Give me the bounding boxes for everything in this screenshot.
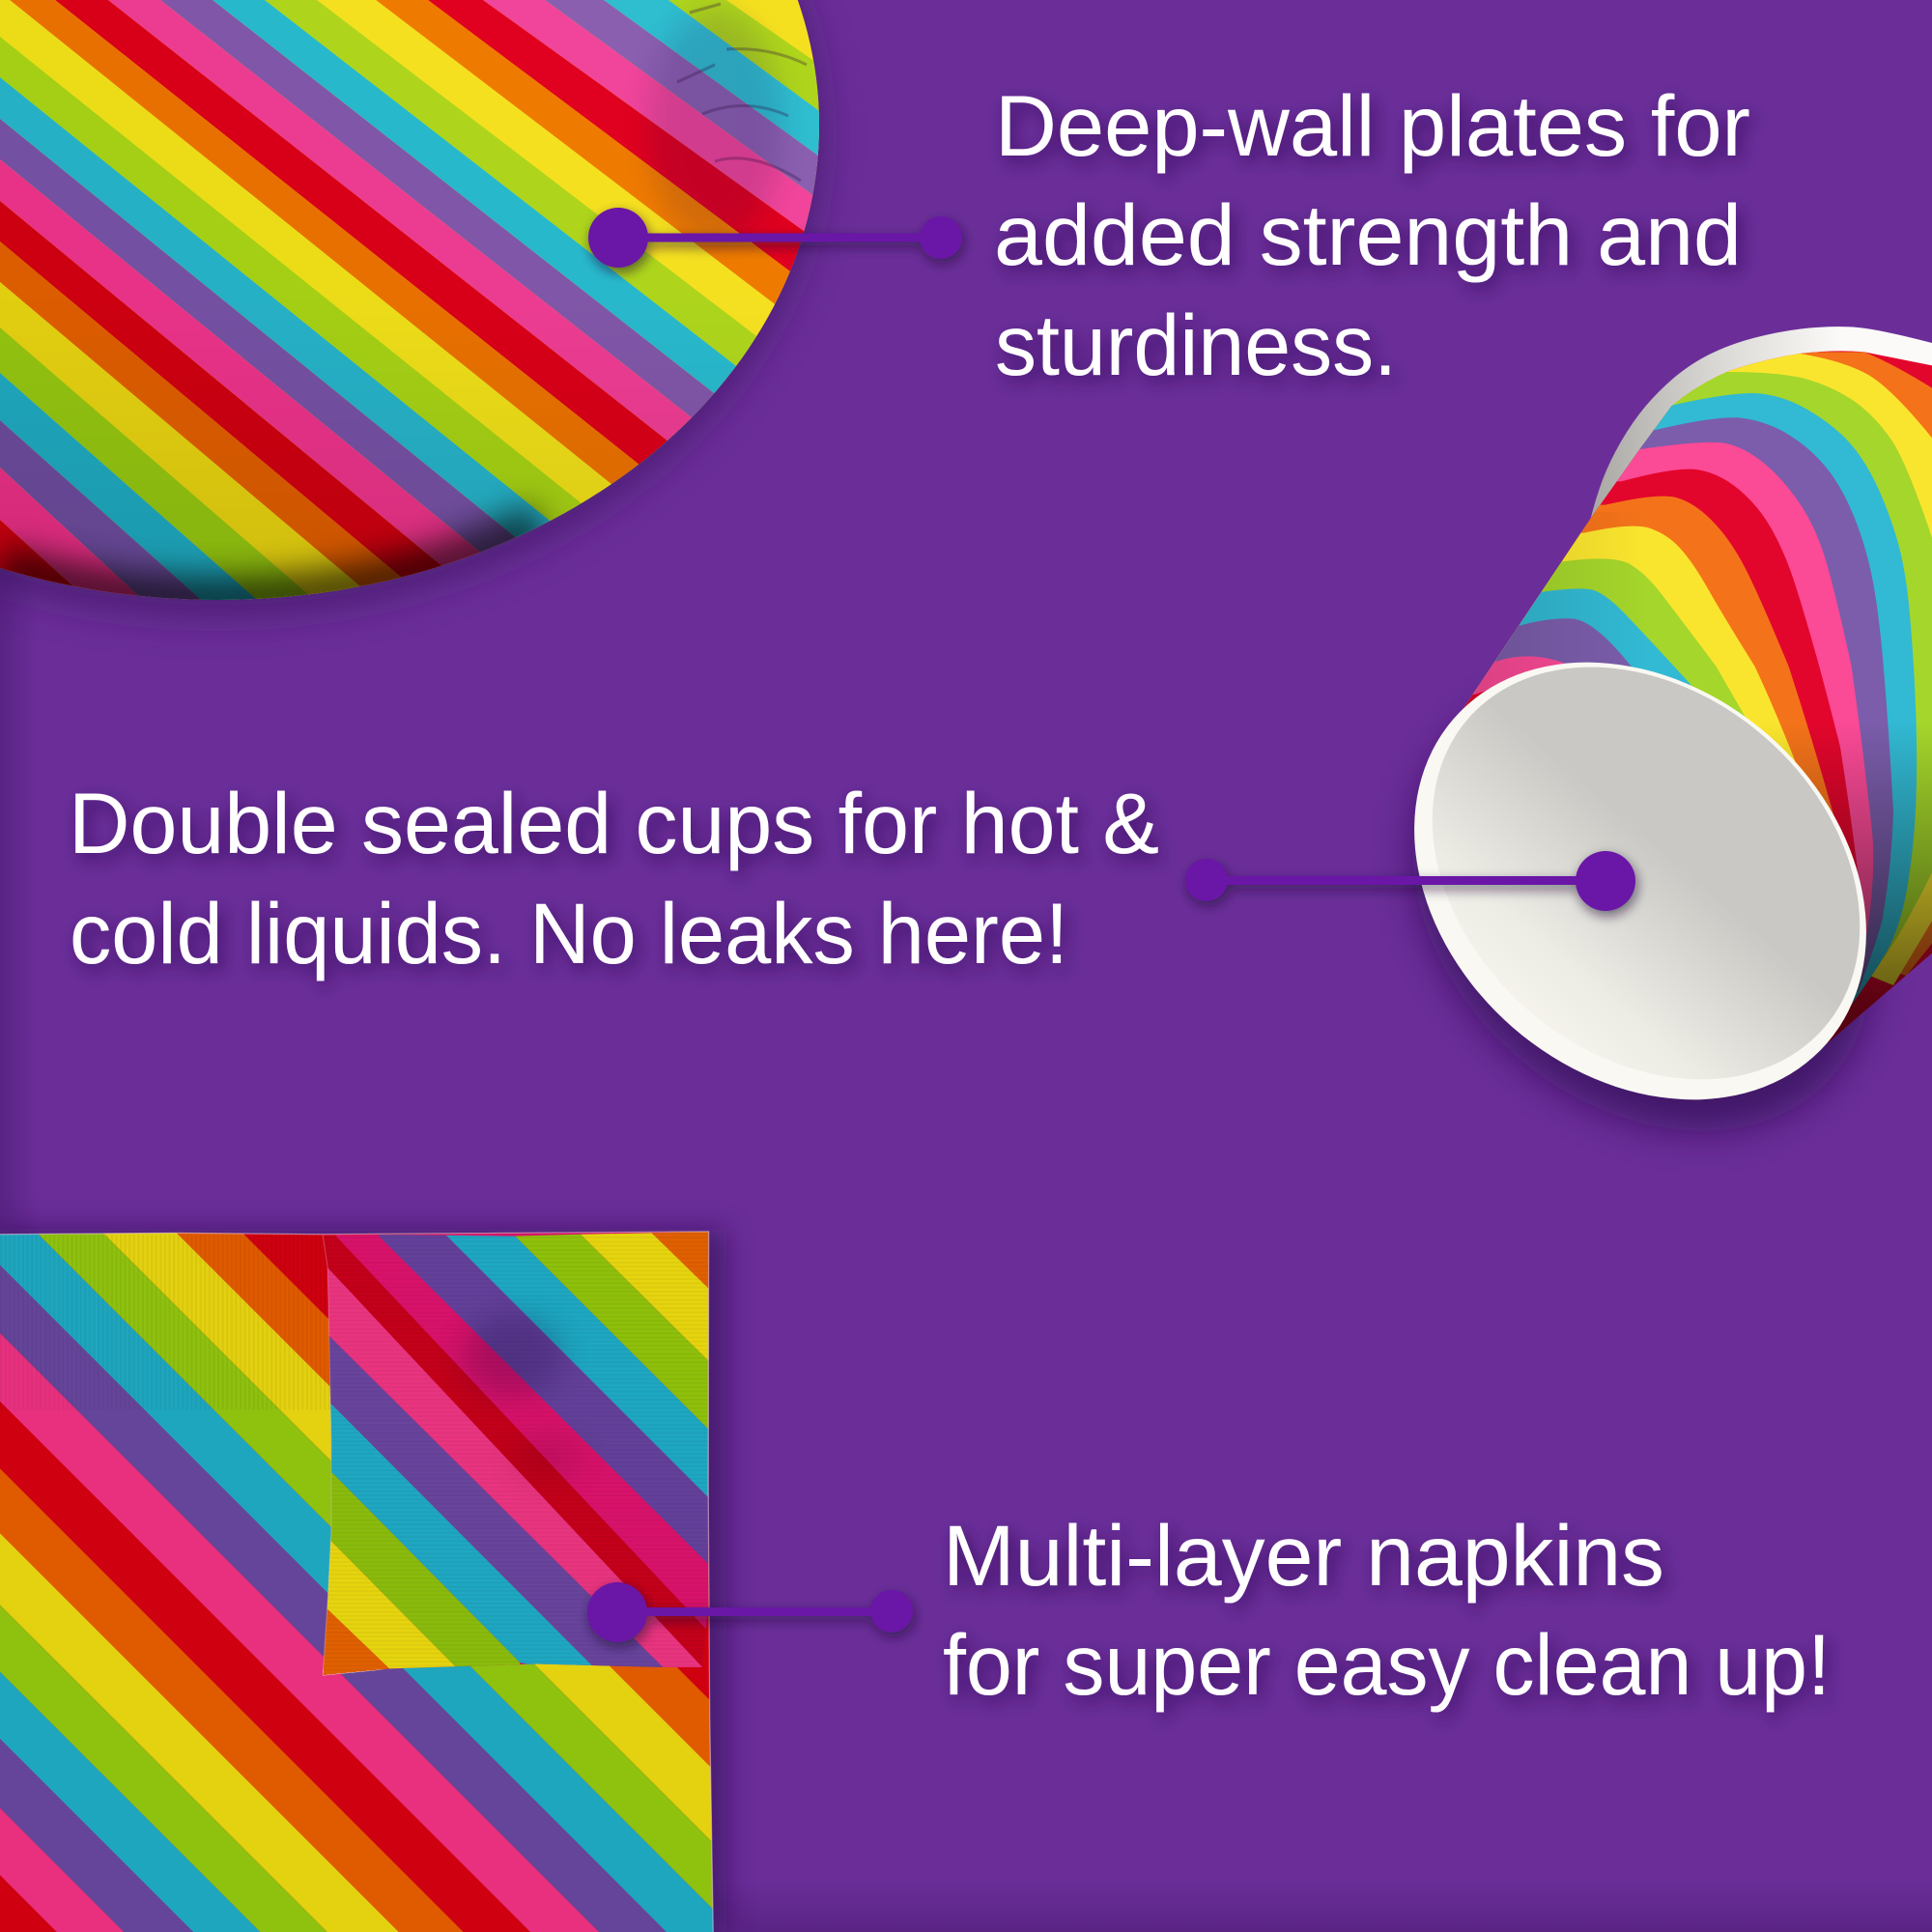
text: cups description: Double sealed cups for hot & (69, 775, 1159, 871)
text: napkins description: for super easy clean up! (943, 1616, 1831, 1713)
text: plates description (994, 77, 1750, 393)
plate: rainbow striped deep-wall plate (0, 0, 831, 618)
text: plates description: sturdiness. (995, 297, 1397, 393)
cup base (1326, 572, 1932, 1190)
callout connector: cup (1185, 851, 1635, 911)
napkins: rainbow striped multi-layer napkin (0, 1217, 738, 1932)
text: cups description: cold liquids. No leaks here! (70, 885, 1068, 981)
cup: rainbow paper cup lying on its side (1395, 327, 1932, 1150)
napkin: folded upper flap (316, 1226, 715, 1684)
callout connector: plate (588, 208, 962, 268)
napkin: lower open layer (0, 1232, 713, 1932)
text: plates description: added strength and (994, 186, 1742, 283)
text: napkins description: Multi-layer napkins (943, 1507, 1664, 1604)
text: cups description (69, 775, 1159, 981)
text: napkins description (943, 1507, 1831, 1713)
text: plates description: Deep-wall plates for (995, 77, 1750, 174)
callout connector: napkin (587, 1582, 913, 1642)
